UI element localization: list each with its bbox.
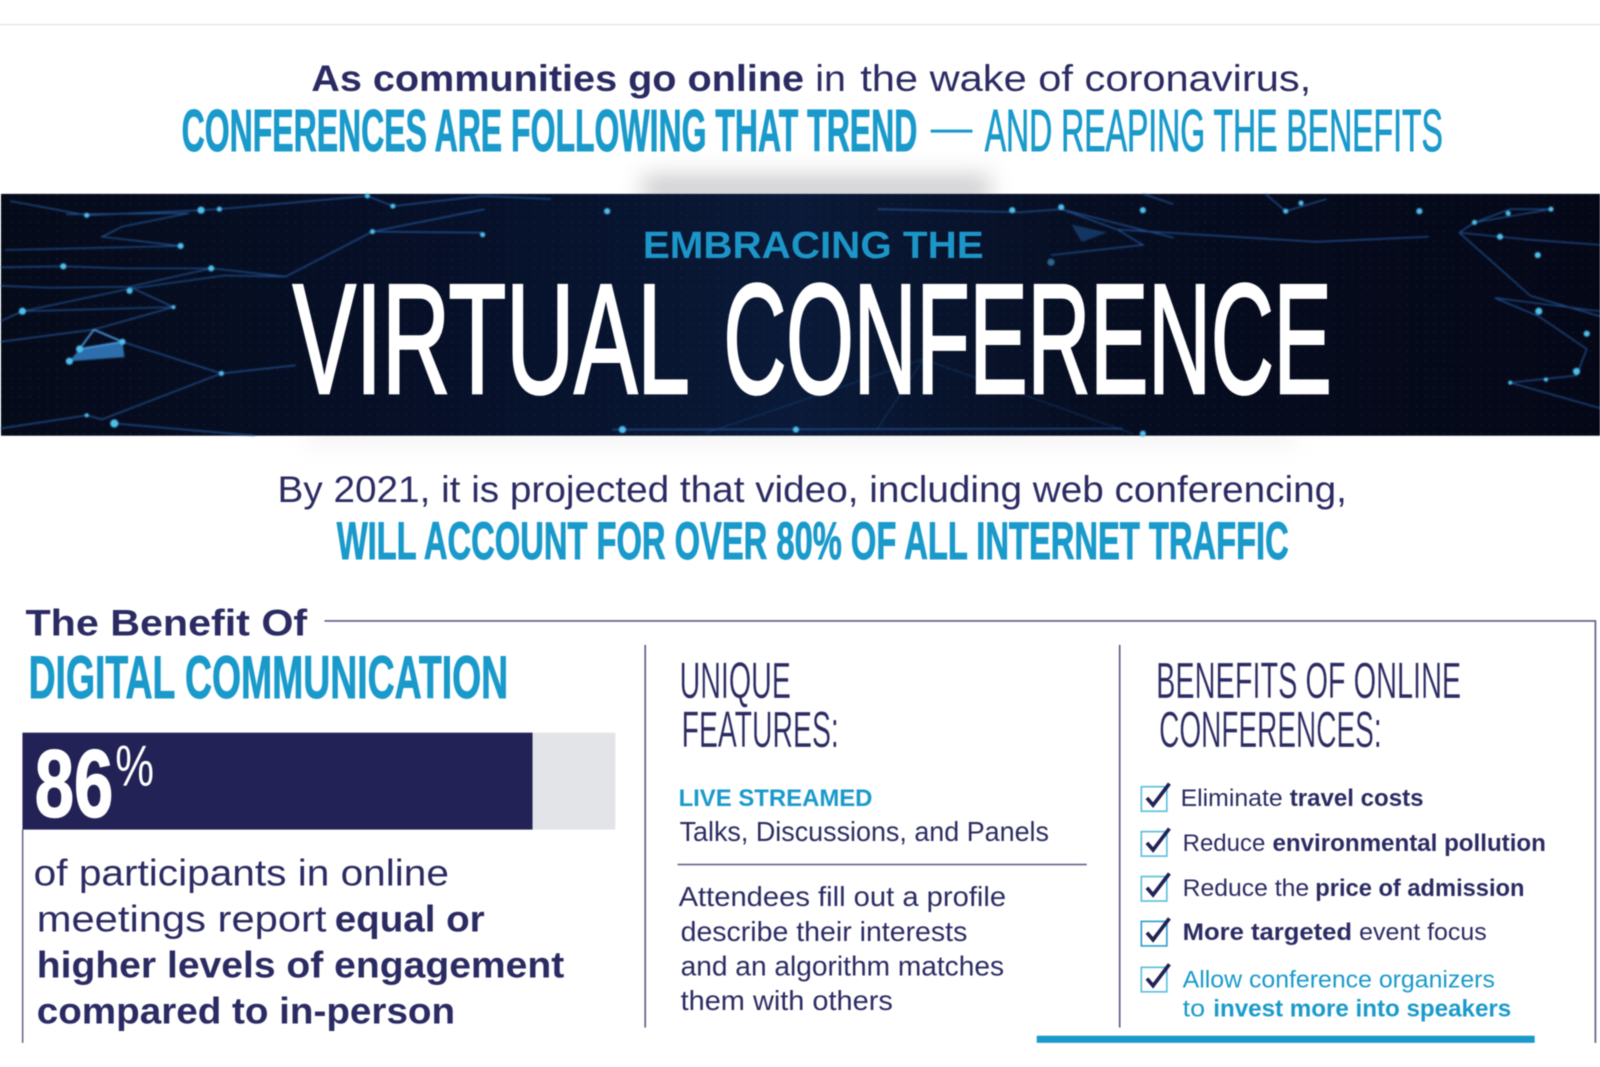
- checklist item 2: [1141, 829, 1546, 857]
- intro heading: [182, 58, 1443, 164]
- checklist item 5: invest more into speakers: [1213, 995, 1511, 1022]
- checklist item 4: More targeted: [1183, 919, 1352, 946]
- accent bar: [1037, 1036, 1535, 1043]
- attendee profile text: [679, 881, 1006, 1016]
- progress bar 86%: 86: [35, 730, 113, 837]
- heading: CONFERENCES:: [1159, 701, 1382, 758]
- progress bar 86%: [22, 730, 615, 837]
- heading: UNIQUE: [680, 652, 791, 709]
- checklist item 1: travel costs: [1290, 785, 1423, 812]
- statistic description: [34, 853, 564, 1031]
- panel: digital communication: [22, 603, 615, 1043]
- banner title: VIRTUAL: [293, 253, 690, 427]
- checklist item 3: price of admission: [1315, 875, 1524, 902]
- heading: [1156, 652, 1461, 758]
- panel: benefits of online conferences: [1141, 652, 1546, 1022]
- section heading: The Benefit Of: [26, 603, 308, 644]
- intro heading: in: [815, 58, 846, 99]
- live streamed: Talks, Discussions, and Panels: [680, 816, 1049, 847]
- banner: [0, 193, 1600, 437]
- progress bar 86%: %: [115, 735, 154, 799]
- statistic description: meetings report: [37, 899, 327, 940]
- statistic description: of participants in online: [34, 853, 449, 894]
- banner shadow: [306, 176, 1296, 443]
- checklist item 5: Allow conference organizers: [1183, 967, 1495, 994]
- bright triangle: [69, 342, 124, 361]
- live streamed: [679, 785, 1049, 847]
- checklist item 4: [1141, 918, 1487, 946]
- checklist item 5: to: [1183, 995, 1205, 1022]
- column divider: [644, 645, 646, 1028]
- attendee profile text: describe their interests: [681, 916, 967, 947]
- checklist item 4: event focus: [1359, 919, 1487, 946]
- checklist item 3: [1141, 873, 1524, 902]
- statistic description: equal or: [335, 899, 485, 940]
- checklist item 2: environmental pollution: [1272, 830, 1546, 857]
- statistic description: compared to in-person: [37, 990, 455, 1031]
- checklist item 5: [1141, 964, 1511, 1022]
- section frame: [324, 621, 1595, 1043]
- section heading: DIGITAL COMMUNICATION: [29, 644, 508, 711]
- intro heading: CONFERENCES ARE FOLLOWING THAT TREND: [182, 97, 917, 164]
- projection statement: By 2021, it is projected that video, including web conferencing,: [278, 469, 1347, 510]
- left rule: [22, 830, 23, 1043]
- column divider: [1119, 645, 1121, 1028]
- intro heading: As communities go online: [311, 58, 804, 99]
- checklist item 3: Reduce the: [1183, 875, 1309, 902]
- live streamed: LIVE STREAMED: [679, 785, 872, 812]
- attendee profile text: and an algorithm matches: [681, 951, 1004, 982]
- heading: [680, 652, 839, 758]
- attendee profile text: Attendees fill out a profile: [679, 881, 1006, 912]
- intro heading: the wake of coronavirus,: [860, 58, 1311, 99]
- network pattern: [0, 193, 1600, 437]
- checklist item 1: [1141, 784, 1423, 812]
- checklist item 1: Eliminate: [1181, 785, 1283, 812]
- banner kicker: EMBRACING THE: [643, 224, 984, 266]
- heading: FEATURES:: [682, 701, 839, 758]
- section heading: [26, 603, 508, 711]
- panel: unique features: [678, 652, 1087, 1016]
- statistic description: higher levels of engagement: [37, 945, 564, 986]
- banner title: [293, 253, 1332, 427]
- network nodes: [19, 193, 1590, 437]
- projection statement: [278, 469, 1347, 571]
- checklist item 2: Reduce: [1183, 830, 1265, 857]
- attendee profile text: them with others: [681, 985, 893, 1016]
